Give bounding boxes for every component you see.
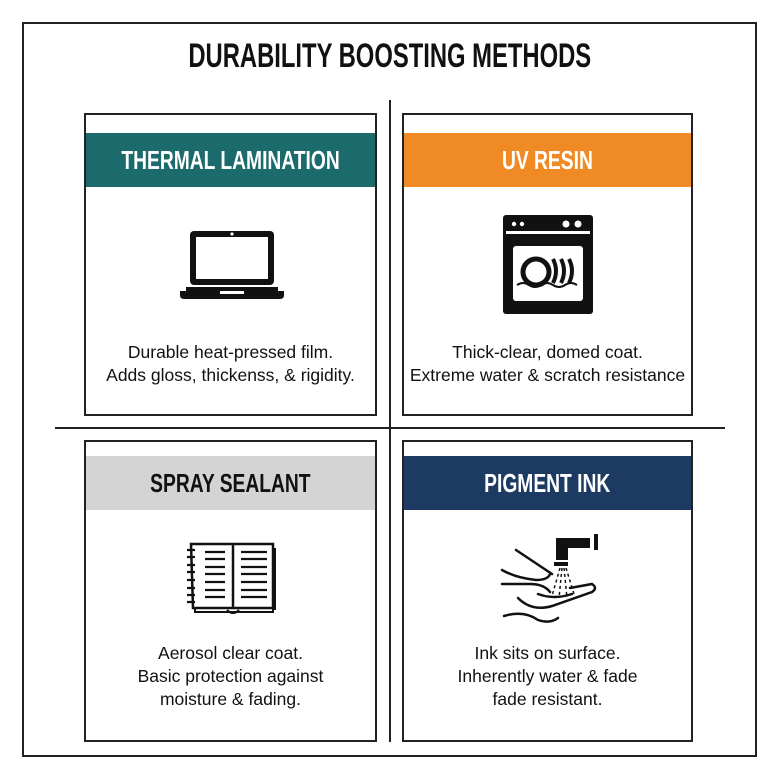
header: spray sealant: SPRAY SEALANT (150, 468, 311, 498)
panel: pigment ink (402, 440, 693, 742)
text: pigment ink description: Inherently water & fade (458, 666, 637, 686)
text: spray sealant description: moisture & fading. (160, 689, 301, 709)
text: uv resin description (410, 342, 685, 385)
title: DURABILITY BOOSTING METHODS (189, 37, 591, 75)
text: pigment ink description: fade resistant. (493, 689, 602, 709)
text: uv resin description: Extreme water & scratch resistance (410, 365, 685, 385)
header: thermal lamination: THERMAL LAMINATION (121, 144, 340, 174)
header: uv resin: UV RESIN (502, 144, 593, 174)
icon: hands under tap (500, 534, 598, 623)
panel: uv resin (402, 113, 693, 416)
header: pigment ink: PIGMENT INK (484, 468, 611, 498)
icon: dishwasher (503, 215, 593, 314)
header: thermal lamination (86, 133, 375, 187)
text: spray sealant description: Aerosol clear coat. (158, 643, 303, 663)
icon: laptop (180, 231, 284, 299)
text: uv resin description: Thick-clear, domed coat. (452, 342, 643, 362)
header: spray sealant (86, 456, 375, 510)
panel: thermal lamination (84, 113, 377, 416)
panel: spray sealant (84, 440, 377, 742)
text: pigment ink description: Ink sits on surface. (475, 643, 620, 663)
text: pigment ink description (458, 643, 637, 709)
text: thermal lamination description: Adds gloss, thickenss, & rigidity. (106, 365, 355, 385)
text: thermal lamination description (106, 342, 355, 385)
text: spray sealant description: Basic protection against (138, 666, 323, 686)
icon: notebook (187, 542, 276, 614)
header: uv resin (404, 133, 691, 187)
text: spray sealant description (138, 643, 324, 709)
header: pigment ink (404, 456, 691, 510)
text: thermal lamination description: Durable heat-pressed film. (128, 342, 333, 362)
